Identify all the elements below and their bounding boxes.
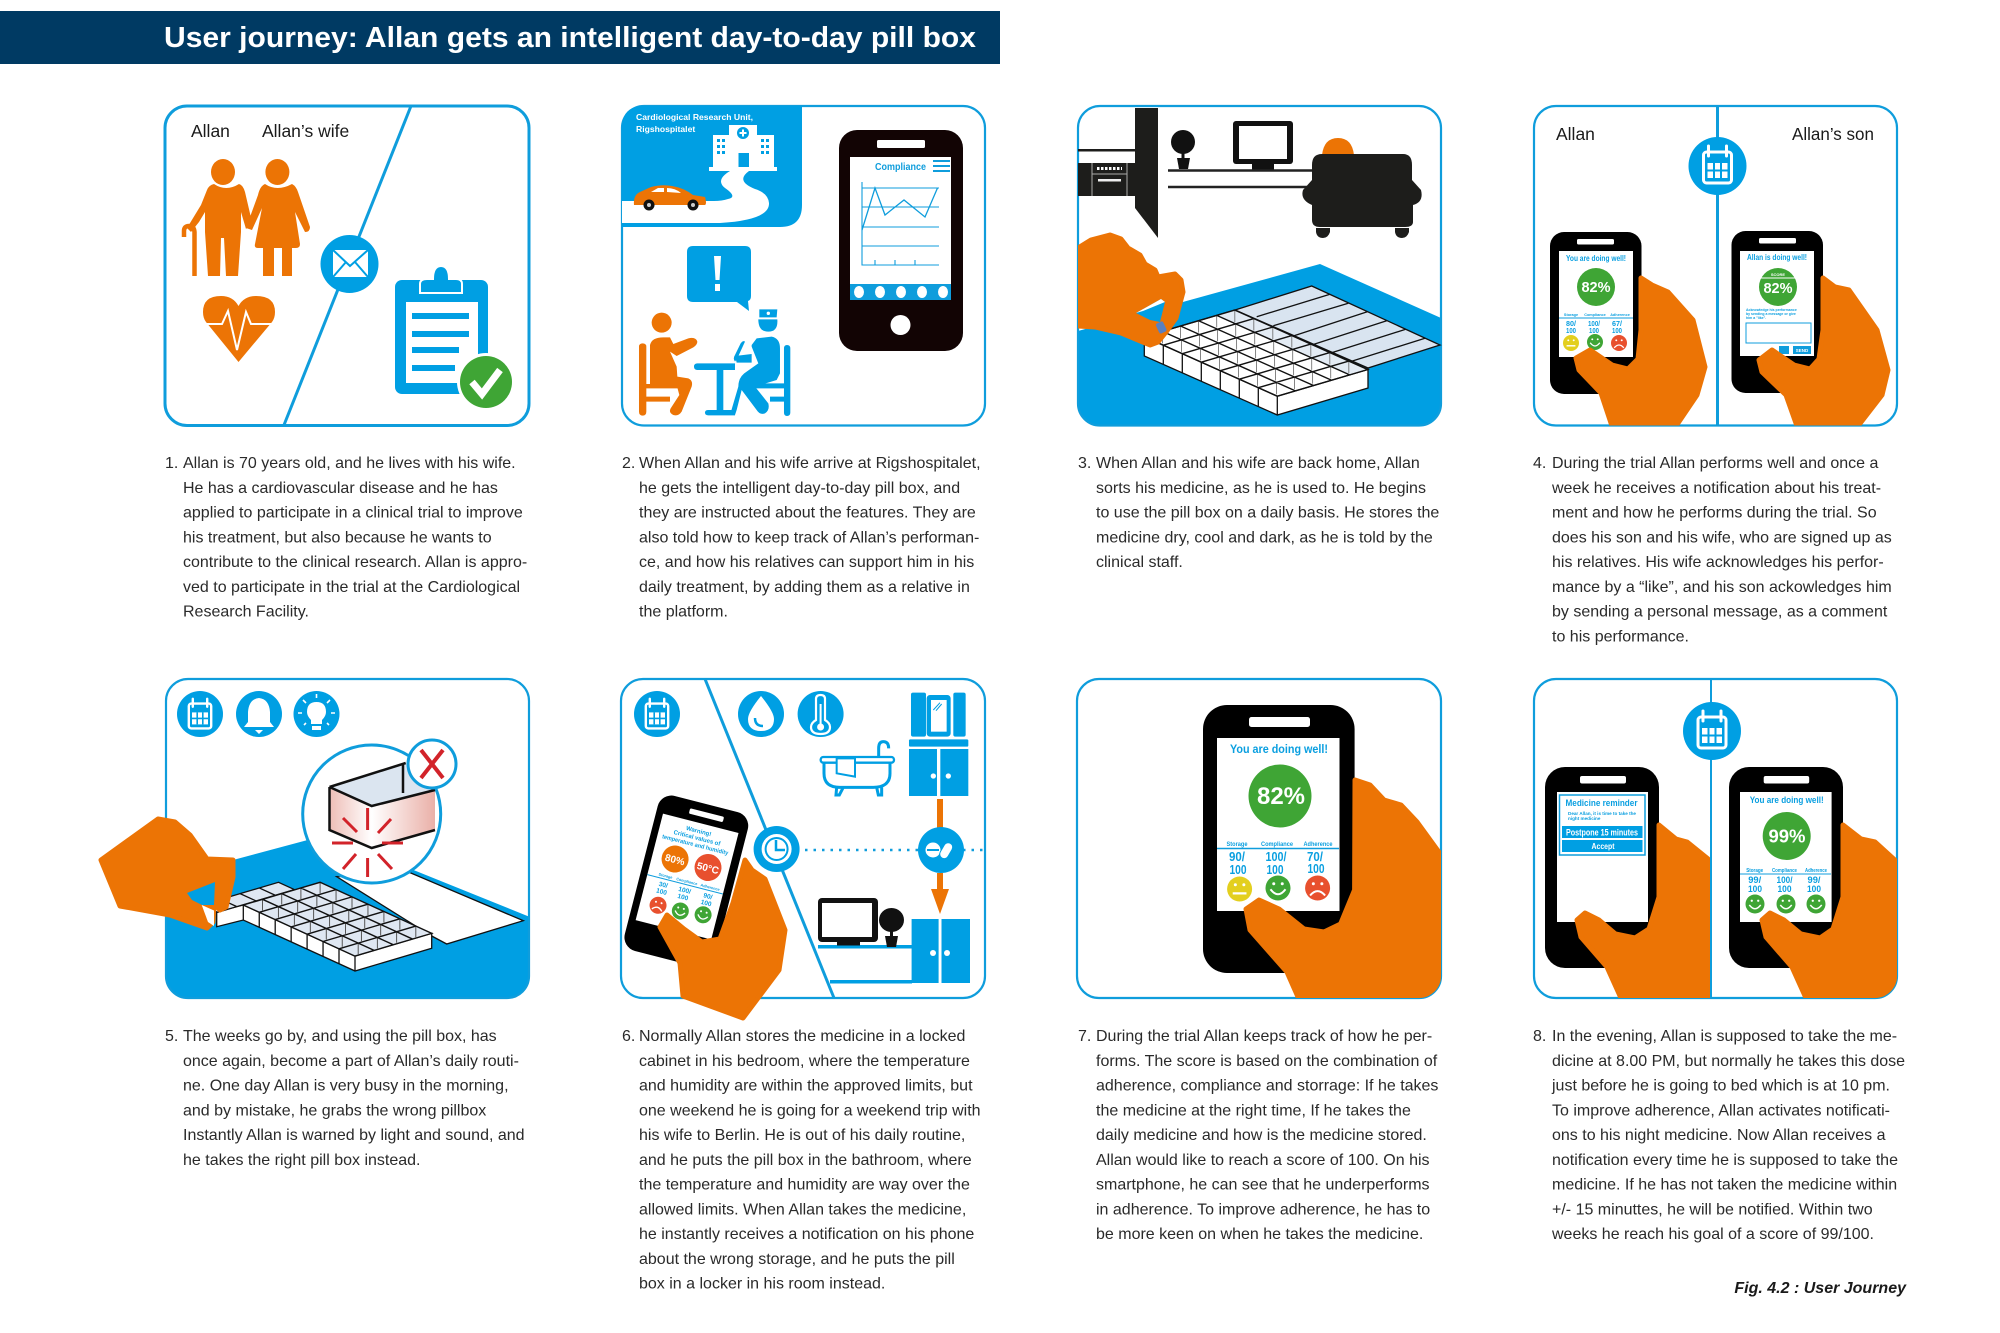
- step text 7: smartphone, he can see that he underperforms: [1096, 1176, 1430, 1194]
- plant: [879, 908, 904, 947]
- son's phone: Acknowledge his performance: [1746, 308, 1797, 312]
- hand holding pill: [1078, 235, 1183, 345]
- phone with 99 percent score: 99%: [1768, 826, 1806, 846]
- panel 5: wrong pill box warning: [101, 679, 530, 998]
- map with hospital, road and car: Rigshospitalet: [636, 124, 695, 134]
- step text 2: the platform.: [639, 604, 728, 620]
- step text 5: once again, become a part of Allan’s daily routi-: [183, 1053, 519, 1070]
- phone with 99 percent score: Storage: [1746, 868, 1763, 874]
- patient seated: [639, 313, 697, 416]
- icon: bell: [236, 691, 282, 737]
- phone with 99 percent score: Compliance: [1772, 868, 1797, 874]
- step text 4: During the trial Allan performs well and once a: [1552, 455, 1878, 472]
- plant: [1171, 130, 1195, 169]
- step text 2: ce, and how his relatives can support him in his: [639, 554, 974, 571]
- icon: clock: [754, 826, 800, 872]
- step text 6: allowed limits. When Allan takes the medicine,: [639, 1201, 966, 1218]
- Allan's phone: 100: [1612, 328, 1622, 335]
- son's phone: [1732, 231, 1823, 393]
- tilted phone with warning: Storage: [658, 873, 673, 880]
- kitchen unit and wall: [1078, 108, 1158, 238]
- phone with score: [1203, 705, 1355, 973]
- step text 6: box in a locker in his room instead.: [639, 1276, 885, 1292]
- Allan's hand: [1576, 278, 1705, 426]
- step text 8: 8.: [1533, 1028, 1546, 1045]
- tilted phone with warning: 50°C: [695, 861, 720, 877]
- Allan's phone: 82%: [1581, 280, 1611, 296]
- tilted phone with warning: 30/: [658, 881, 669, 890]
- step text 4: mance by a “like”, and his son ackowledges him: [1552, 579, 1892, 596]
- red X badge: [408, 740, 456, 788]
- icon: water drop: [738, 691, 784, 737]
- step text 7: 7.: [1078, 1028, 1091, 1045]
- blue floor: [166, 830, 530, 998]
- son's phone: SEND: [1796, 348, 1809, 353]
- phone with compliance chart: [839, 130, 963, 351]
- phone with compliance chart: Compliance: [875, 162, 926, 173]
- step text 1: contribute to the clinical research. Allan is appro-: [183, 554, 527, 571]
- speech bubble with exclamation: [687, 246, 751, 311]
- step text 1: his treatment, but also because he wants to: [183, 529, 492, 546]
- step text 6: cabinet in his bedroom, where the temperature: [639, 1053, 970, 1070]
- step text 4: does his son and his wife, who are signed up as: [1552, 529, 1892, 546]
- step text 1: 1.: [165, 455, 178, 472]
- title banner: [0, 11, 1000, 64]
- right hand: [1762, 825, 1897, 998]
- phone with score: Storage: [1226, 841, 1248, 848]
- shelves: [1168, 170, 1312, 187]
- phone with score: You are doing well!: [1230, 742, 1328, 756]
- step text 1: applied to participate in a clinical trial to improve: [183, 504, 523, 522]
- step text 2: he gets the intelligent day-to-day pill box, and: [639, 480, 960, 497]
- icon: envelope circle: [320, 235, 378, 293]
- step text 6: his wife to Berlin. He is out of his daily routine,: [639, 1127, 965, 1144]
- step text 1: Allan is 70 years old, and he lives with his wife.: [183, 455, 516, 472]
- icon: elderly couple: [184, 159, 310, 276]
- phone with medicine reminder: Postpone 15 minutes: [1566, 828, 1638, 838]
- pill box: [202, 882, 432, 971]
- phone with 99 percent score: 100: [1778, 884, 1792, 895]
- step text 4: by sending a personal message, as a comment: [1552, 604, 1888, 620]
- label: Allan: Allan: [1556, 124, 1595, 144]
- step text 6: he instantly receives a notification on his phone: [639, 1226, 974, 1243]
- step text 7: Allan would like to reach a score of 100. On his: [1096, 1152, 1430, 1169]
- step text 6: 6.: [622, 1028, 635, 1045]
- panel 8: evening reminder: [1534, 679, 1897, 998]
- step text 1: Research Facility.: [183, 604, 309, 620]
- phone with 99 percent score: You are doing well!: [1750, 795, 1824, 806]
- phone with score: 100: [1266, 862, 1284, 877]
- step text 4: 4.: [1533, 455, 1546, 472]
- phone with medicine reminder: Medicine reminder: [1566, 798, 1638, 809]
- step text 2: also told how to keep track of Allan’s performan-: [639, 529, 979, 546]
- Allan's phone: Storage: [1564, 313, 1578, 317]
- son's phone: Allan is doing well!: [1747, 253, 1807, 262]
- tilted phone with warning: 80%: [664, 853, 686, 868]
- step text 8: To improve adherence, Allan activates notificati-: [1552, 1102, 1890, 1119]
- phone with 99 percent score: [1729, 767, 1843, 968]
- left hand: [1577, 825, 1708, 998]
- step text 7: the medicine at the right time, If he takes the: [1096, 1102, 1411, 1119]
- step text 3: medicine dry, cool and dark, as he is told by the: [1096, 529, 1433, 546]
- step text 7: During the trial Allan keeps track of how he per-: [1096, 1028, 1432, 1045]
- son's phone: SCORE: [1771, 272, 1785, 277]
- step text 7: adherence, compliance and storrage: If he takes: [1096, 1078, 1438, 1094]
- figure caption: Fig. 4.2 : User Journey: [1734, 1280, 1907, 1297]
- step text 6: and humidity are within the approved limits, but: [639, 1078, 973, 1094]
- label: Allan: Allan: [191, 121, 230, 141]
- step text 5: he takes the right pill box instead.: [183, 1152, 420, 1169]
- phone with 99 percent score: 100: [1807, 884, 1821, 895]
- tilted phone with warning: Adherence: [700, 883, 720, 892]
- label: Allan's son: Allan’s son: [1792, 124, 1874, 144]
- phone with score: 100/: [1266, 849, 1287, 864]
- tilted phone with warning: temperature and humidity: [661, 834, 729, 857]
- panel 1: Allan and his wife: [165, 106, 529, 426]
- phone with medicine reminder: night medicine: [1568, 816, 1601, 821]
- step text 2: 2.: [622, 455, 635, 472]
- Allan's phone: 80/: [1566, 321, 1576, 328]
- phone with score: Compliance: [1261, 841, 1293, 848]
- phone with 99 percent score: 99/: [1748, 875, 1762, 886]
- Allan's phone: 100: [1589, 328, 1599, 335]
- icon: calendar: [1688, 137, 1746, 195]
- step text 3: to use the pill box on a daily basis. He stores the: [1096, 504, 1439, 522]
- icon: heart with pulse: [203, 296, 275, 362]
- step text 2: they are instructed about the features. They are: [639, 504, 976, 522]
- phone with medicine reminder: [1545, 767, 1659, 968]
- hand: [1246, 780, 1441, 998]
- step text 5: and by mistake, he grabs the wrong pillbox: [183, 1102, 486, 1119]
- tilted phone with warning: Critical values of: [673, 830, 722, 848]
- phone with medicine reminder: Accept: [1592, 841, 1615, 851]
- step text 7: daily medicine and how is the medicine stored.: [1096, 1127, 1427, 1144]
- tilted phone with warning: 100: [700, 899, 712, 908]
- Allan's phone: 100: [1566, 328, 1576, 335]
- Allan's phone: 100/: [1588, 321, 1600, 328]
- television: [1233, 121, 1293, 170]
- son's phone: by sending a message or give: [1746, 312, 1796, 316]
- television: [818, 898, 878, 946]
- step text 5: 5.: [165, 1028, 178, 1045]
- phone with 99 percent score: 100/: [1776, 875, 1793, 886]
- tilted phone with warning: 100/: [677, 886, 692, 896]
- step text 6: and he puts the pill box in the bathroom, where: [639, 1152, 972, 1169]
- panel 7: keeping track of the score: [1077, 679, 1441, 998]
- icon: clipboard with check: [395, 266, 515, 411]
- step text 7: be more keen on when he takes the medicine.: [1096, 1226, 1423, 1243]
- step text 8: just before he is going to bed which is at 10 pm.: [1551, 1078, 1890, 1094]
- step text 5: Instantly Allan is warned by light and sound, and: [183, 1127, 525, 1144]
- phone with score: Adherence: [1304, 841, 1333, 848]
- Allan's phone: 67/: [1612, 321, 1622, 328]
- step text 6: Normally Allan stores the medicine in a locked: [639, 1028, 965, 1045]
- son's phone: 82%: [1763, 281, 1793, 297]
- bathtub: [821, 742, 894, 795]
- armchair with person: [1302, 138, 1422, 238]
- step text 8: dicine at 8.00 PM, but normally he takes this dose: [1552, 1053, 1905, 1070]
- white lid plane: [337, 873, 523, 944]
- phone with medicine reminder: Dear Allan, it is time to take the: [1568, 811, 1636, 816]
- step text 6: one weekend he is going for a weekend trip with: [639, 1102, 981, 1119]
- phone with score: 100: [1230, 862, 1246, 877]
- icon: pills: [918, 827, 964, 873]
- tilted phone with warning: 100: [677, 893, 689, 902]
- step text 1: He has a cardiovascular disease and he has: [183, 480, 498, 497]
- step text 3: When Allan and his wife are back home, Allan: [1096, 455, 1420, 472]
- phone with 99 percent score: 100: [1748, 884, 1762, 895]
- step text 6: the temperature and humidity are way over the: [639, 1176, 970, 1194]
- label: Allan's wife: Allan’s wife: [262, 121, 349, 141]
- step text 7: forms. The score is based on the combination of: [1096, 1053, 1438, 1070]
- step text 4: week he receives a notification about his treat-: [1551, 480, 1881, 497]
- panel 6: wrong storage warning: [621, 679, 987, 1018]
- tilted phone with warning: [621, 793, 751, 971]
- icon: calendar: [1683, 702, 1741, 760]
- Allan's phone: Compliance: [1584, 313, 1606, 317]
- step text 3: sorts his medicine, as he is used to. He begins: [1096, 480, 1426, 497]
- step text 3: 3.: [1078, 455, 1091, 472]
- son's hand: [1759, 278, 1888, 426]
- step text 8: notification every time he is supposed to take the: [1552, 1152, 1898, 1169]
- title banner: User journey: Allan gets an intelligent day-to-day pill box: [164, 22, 976, 54]
- icon: calendar: [177, 691, 223, 737]
- panel 2: arrival at Rigshospitalet: [622, 106, 985, 426]
- phone with 99 percent score: Adherence: [1805, 868, 1827, 874]
- magnified compartment: [303, 745, 441, 883]
- orange arrow: [931, 799, 949, 914]
- step text 2: When Allan and his wife arrive at Rigshospitalet,: [639, 455, 981, 472]
- step text 7: in adherence. To improve adherence, he has to: [1096, 1201, 1430, 1218]
- tilted phone with warning: Warning!: [685, 826, 712, 838]
- tilted phone with warning: 90/: [702, 892, 713, 901]
- Allan's phone: You are doing well!: [1566, 254, 1626, 263]
- bathroom cabinet with mirror: [909, 693, 968, 796]
- bedroom shelf and locker: [818, 919, 970, 984]
- step text 8: weeks he reach his goal of a score of 99/100.: [1551, 1226, 1874, 1243]
- step text 5: ne. One day Allan is very busy in the morning,: [183, 1078, 509, 1094]
- hand: [101, 819, 233, 928]
- step text 5: The weeks go by, and using the pill box, has: [183, 1028, 497, 1045]
- step text 8: +/- 15 minuttes, he will be notified. Within two: [1552, 1201, 1873, 1218]
- tilted phone with warning: Compliance: [676, 877, 698, 886]
- step text 4: his relatives. His wife acknowledges his perfor-: [1552, 554, 1884, 571]
- hand holding phone: [660, 860, 785, 1018]
- icon: calendar: [634, 691, 680, 737]
- Allan's phone: Adherence: [1610, 313, 1630, 317]
- Allan's phone: [1550, 232, 1642, 394]
- blue floor: [1078, 264, 1441, 426]
- table and doctor: [694, 309, 790, 416]
- step text 2: daily treatment, by adding them as a relative in: [639, 579, 970, 596]
- phone with score: 70/: [1307, 849, 1323, 864]
- phone with score: 100: [1308, 861, 1324, 876]
- step text 6: about the wrong storage, and he puts the pill: [639, 1251, 955, 1268]
- map with hospital, road and car: Cardiological Research Unit,: [636, 112, 753, 122]
- panel 3: sorting medicine at home: [1078, 106, 1441, 426]
- tilted phone with warning: 100: [655, 887, 668, 897]
- icon: light bulb: [294, 691, 340, 737]
- map with hospital, road and car: [622, 106, 802, 227]
- step text 8: medicine. If he has not taken the medicine within: [1552, 1176, 1897, 1194]
- son's phone: him a "like".: [1746, 316, 1766, 320]
- icon: thermometer: [798, 691, 844, 737]
- step text 8: In the evening, Allan is supposed to take the me-: [1552, 1028, 1897, 1045]
- step text 4: ment and how he performs during the trial. So: [1552, 504, 1877, 522]
- open pill box: [1144, 286, 1440, 415]
- step text 1: ved to participate in the trial at the Cardiological: [183, 579, 520, 596]
- phone with score: 82%: [1257, 783, 1305, 810]
- panel 4: weekly notification: [1534, 106, 1897, 426]
- step text 3: clinical staff.: [1096, 554, 1183, 571]
- step text 8: ons to his night medicine. Now Allan receives a: [1552, 1127, 1886, 1144]
- step text 4: to his performance.: [1552, 628, 1689, 645]
- phone with 99 percent score: 99/: [1808, 875, 1821, 886]
- phone with score: 90/: [1229, 849, 1245, 864]
- dotted timeline: [805, 849, 987, 851]
